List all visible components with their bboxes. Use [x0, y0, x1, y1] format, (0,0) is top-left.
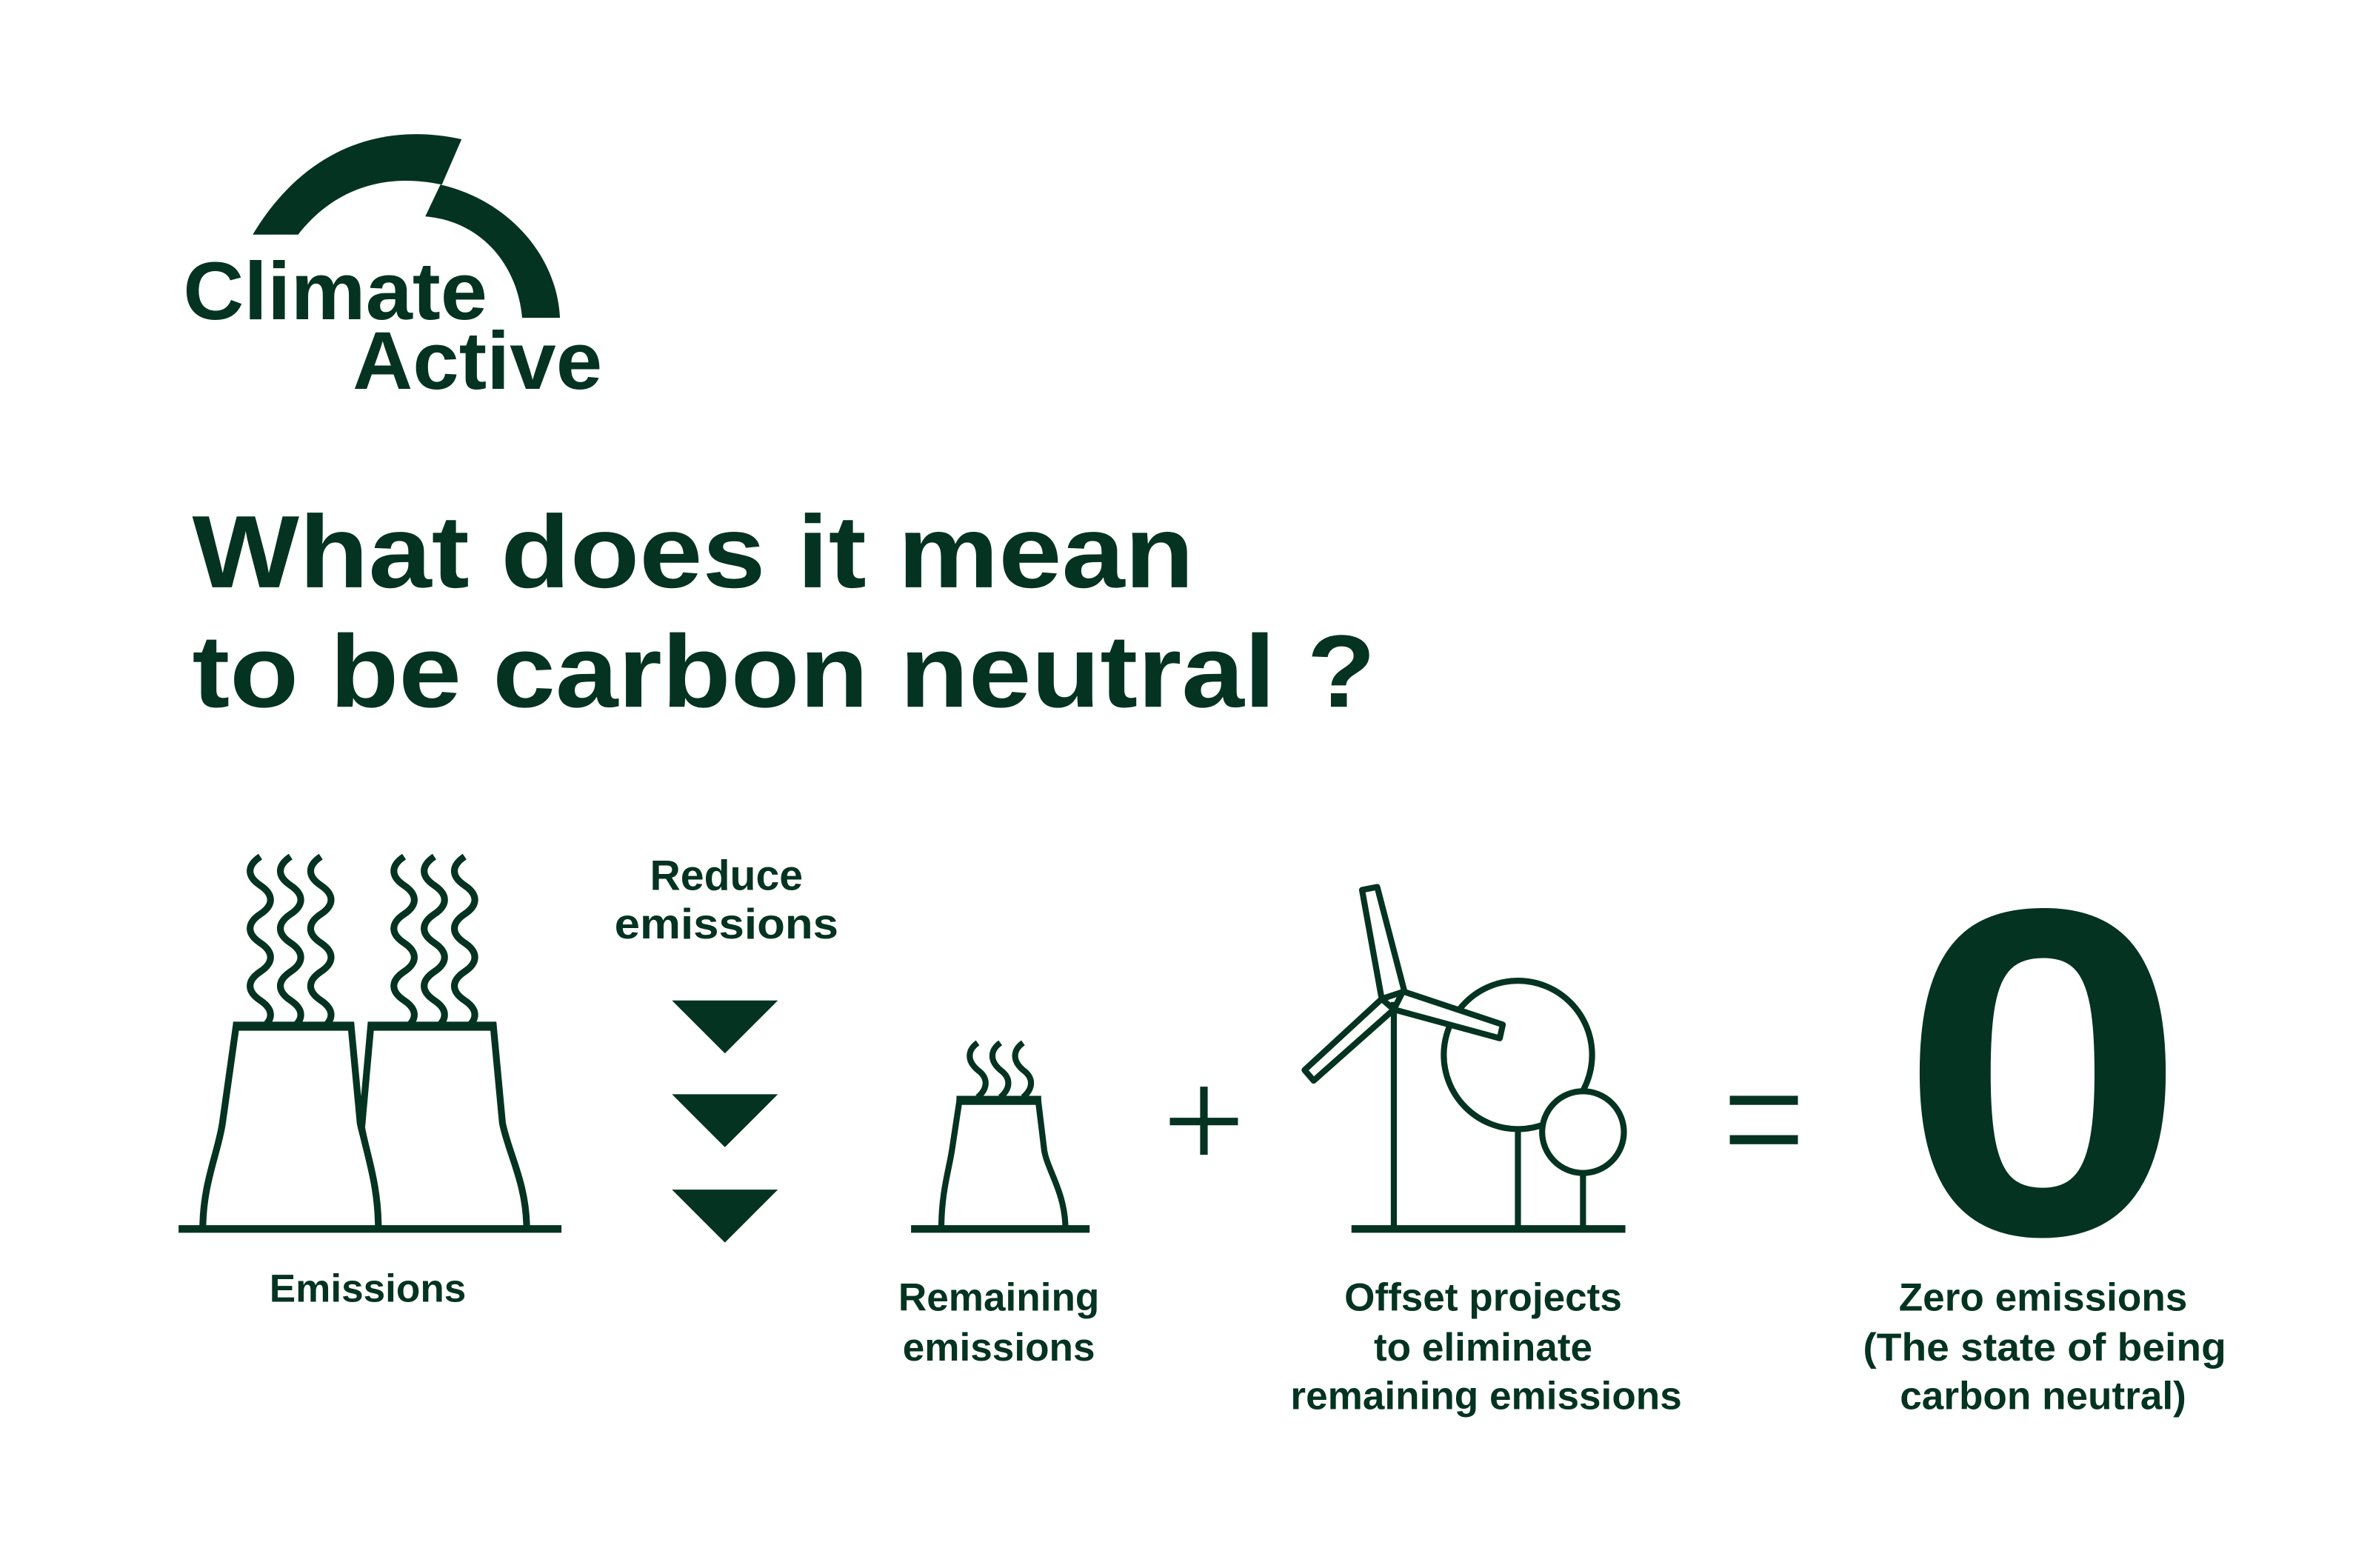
label: Offset projects: remaining emissions: [1290, 1374, 1682, 1418]
label: Offset projects: Offset projects: [1344, 1276, 1622, 1320]
title: to be carbon neutral ?: [193, 614, 1375, 729]
label: Zero emissions: [1863, 1276, 2226, 1418]
label: Zero emissions: carbon neutral): [1900, 1374, 2186, 1418]
label: Remaining emissions: emissions: [903, 1326, 1095, 1370]
label: Remaining emissions: Remaining: [898, 1276, 1099, 1320]
label: Reduce emissions: [615, 853, 838, 948]
title: [193, 495, 1375, 729]
icon: equals: [1730, 1095, 1798, 1144]
label: Zero emissions: (The state of being: [1863, 1326, 2226, 1370]
icon: small remaining tower: [911, 1043, 1089, 1229]
logo: Climate Active: Climate: [183, 246, 487, 337]
logo: Climate Active: [183, 134, 602, 407]
label: Remaining emissions: [898, 1276, 1099, 1370]
title: What does it mean: [193, 495, 1194, 610]
label: Offset projects: [1290, 1276, 1682, 1418]
icon: wind turbine and trees: [1304, 887, 1626, 1229]
label: Reduce emissions: Reduce: [650, 853, 803, 900]
icon: plus: [1170, 1087, 1238, 1155]
big zero: 0: [1899, 812, 2187, 1332]
label: Offset projects: to eliminate: [1374, 1326, 1592, 1370]
arrows: three down triangles: [672, 1001, 778, 1243]
label: Zero emissions: Zero emissions: [1899, 1276, 2187, 1320]
logo: Climate Active: Active: [353, 316, 602, 407]
label: Reduce emissions: emissions: [615, 901, 838, 948]
icon: two emitting cooling towers: [178, 857, 561, 1229]
label: Emissions: Emissions: [270, 1267, 466, 1310]
